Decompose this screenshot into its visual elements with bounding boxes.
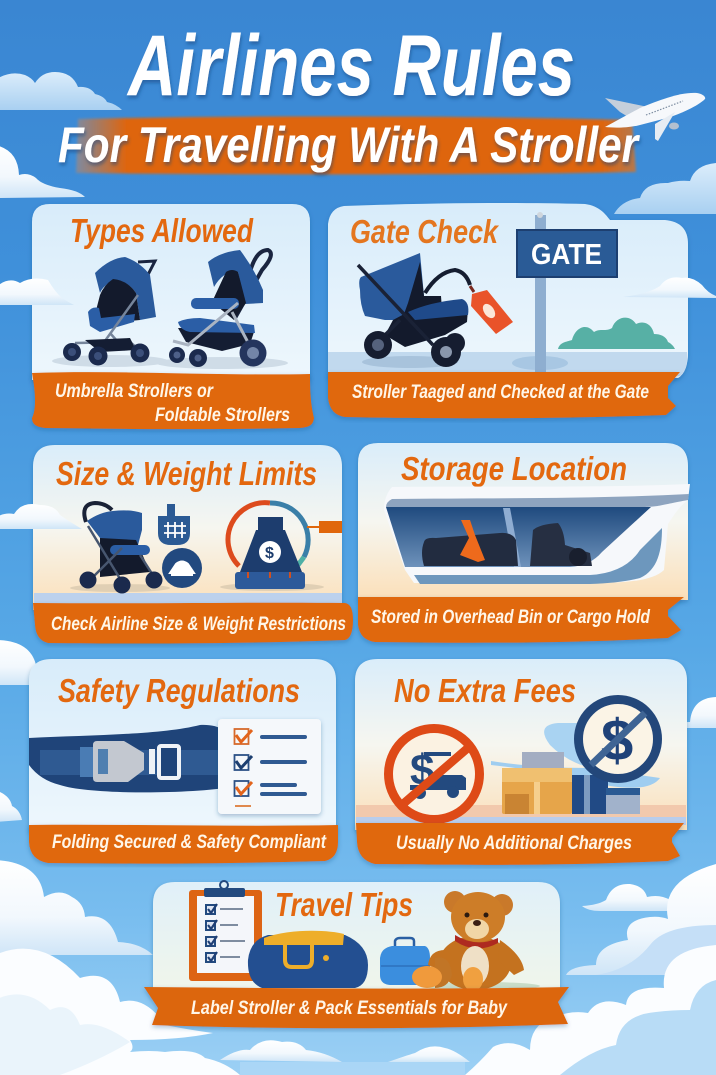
icon: duffel bag — [248, 931, 368, 988]
icon: gate sign: GATE — [531, 239, 602, 271]
panel background — [358, 443, 688, 600]
ground — [328, 352, 687, 376]
banner: storage: Stored in Overhead Bin or Cargo Hold — [371, 606, 651, 628]
icon: clipboard — [189, 881, 262, 981]
heading: Travel Tips — [275, 886, 413, 923]
overhead bin — [384, 484, 690, 584]
panel background — [32, 204, 310, 380]
panel: size and weight limits — [33, 445, 353, 644]
title: Airlines Rules — [126, 18, 575, 114]
heading: Storage Location — [401, 450, 627, 487]
icon: foldable stroller — [156, 250, 288, 369]
panel: types allowed — [32, 204, 314, 429]
icon: no fees prohibition sign — [388, 728, 480, 820]
panel: storage location — [358, 443, 690, 643]
background clouds — [0, 72, 716, 822]
panel: travel tips — [144, 881, 569, 1028]
panel: no extra fees — [355, 659, 687, 865]
icon: weight scale: $ — [265, 545, 274, 562]
cloud: over first row — [0, 277, 716, 305]
banner: no fees: Usually No Additional Charges — [396, 832, 632, 854]
lower clouds — [0, 860, 716, 1075]
banner: size and weight — [33, 603, 353, 644]
icon: crossed dollar sign — [578, 700, 658, 778]
icon: luggage tag — [470, 286, 513, 334]
icon: boxes and luggage — [491, 723, 660, 814]
icon: stroller — [70, 503, 170, 594]
tag in bin — [460, 520, 485, 562]
icon: teddy bear — [412, 891, 540, 991]
banner: no fees — [356, 823, 684, 865]
stroller in bin — [422, 533, 518, 566]
panel background — [29, 659, 336, 832]
banner: safety — [29, 825, 338, 864]
banner: types allowed: Foldable Strollers — [155, 404, 290, 426]
banner: travel tips: Label Stroller & Pack Essentials for Baby — [191, 997, 508, 1019]
banner: travel tips — [144, 987, 569, 1028]
icon: size gauge — [158, 504, 202, 588]
cloud: over second row — [0, 504, 82, 529]
panel background — [33, 445, 342, 610]
icon: bush — [558, 318, 675, 349]
icon: umbrella stroller — [52, 257, 168, 367]
panel background — [328, 203, 688, 378]
banner: safety: Folding Secured & Safety Compliant — [52, 831, 327, 853]
heading: Gate Check — [350, 213, 499, 250]
banner: size and weight: Check Airline Size & Weight Restrictions — [51, 613, 346, 635]
panel background — [153, 882, 560, 995]
panel background — [355, 659, 687, 830]
banner: storage — [358, 597, 684, 643]
banner: types allowed — [32, 372, 314, 429]
icon: seat belt — [29, 725, 232, 792]
icon: airplane — [605, 93, 705, 141]
icon: gate sign — [512, 212, 617, 372]
icon: checklist — [218, 719, 321, 814]
heading: No Extra Fees — [394, 672, 576, 709]
icon: carriage stroller — [358, 253, 470, 368]
heading: Size & Weight Limits — [56, 455, 317, 492]
panel: gate check — [328, 203, 688, 418]
icon: weight scale — [220, 503, 342, 591]
banner: types allowed: Umbrella Strollers or — [55, 380, 214, 402]
ground — [34, 593, 342, 605]
heading: Types Allowed — [70, 212, 254, 249]
floor — [356, 805, 686, 817]
heading: Safety Regulations — [58, 672, 300, 709]
icon: crossed dollar sign: $ — [601, 708, 633, 773]
icon: small blue case — [380, 938, 430, 985]
panel: safety regulations — [29, 659, 338, 864]
icon: no fees prohibition sign: $ — [410, 746, 434, 795]
banner: gate check: Stroller Taaged and Checked at the Gate — [352, 381, 649, 403]
banner: gate check — [328, 372, 680, 418]
